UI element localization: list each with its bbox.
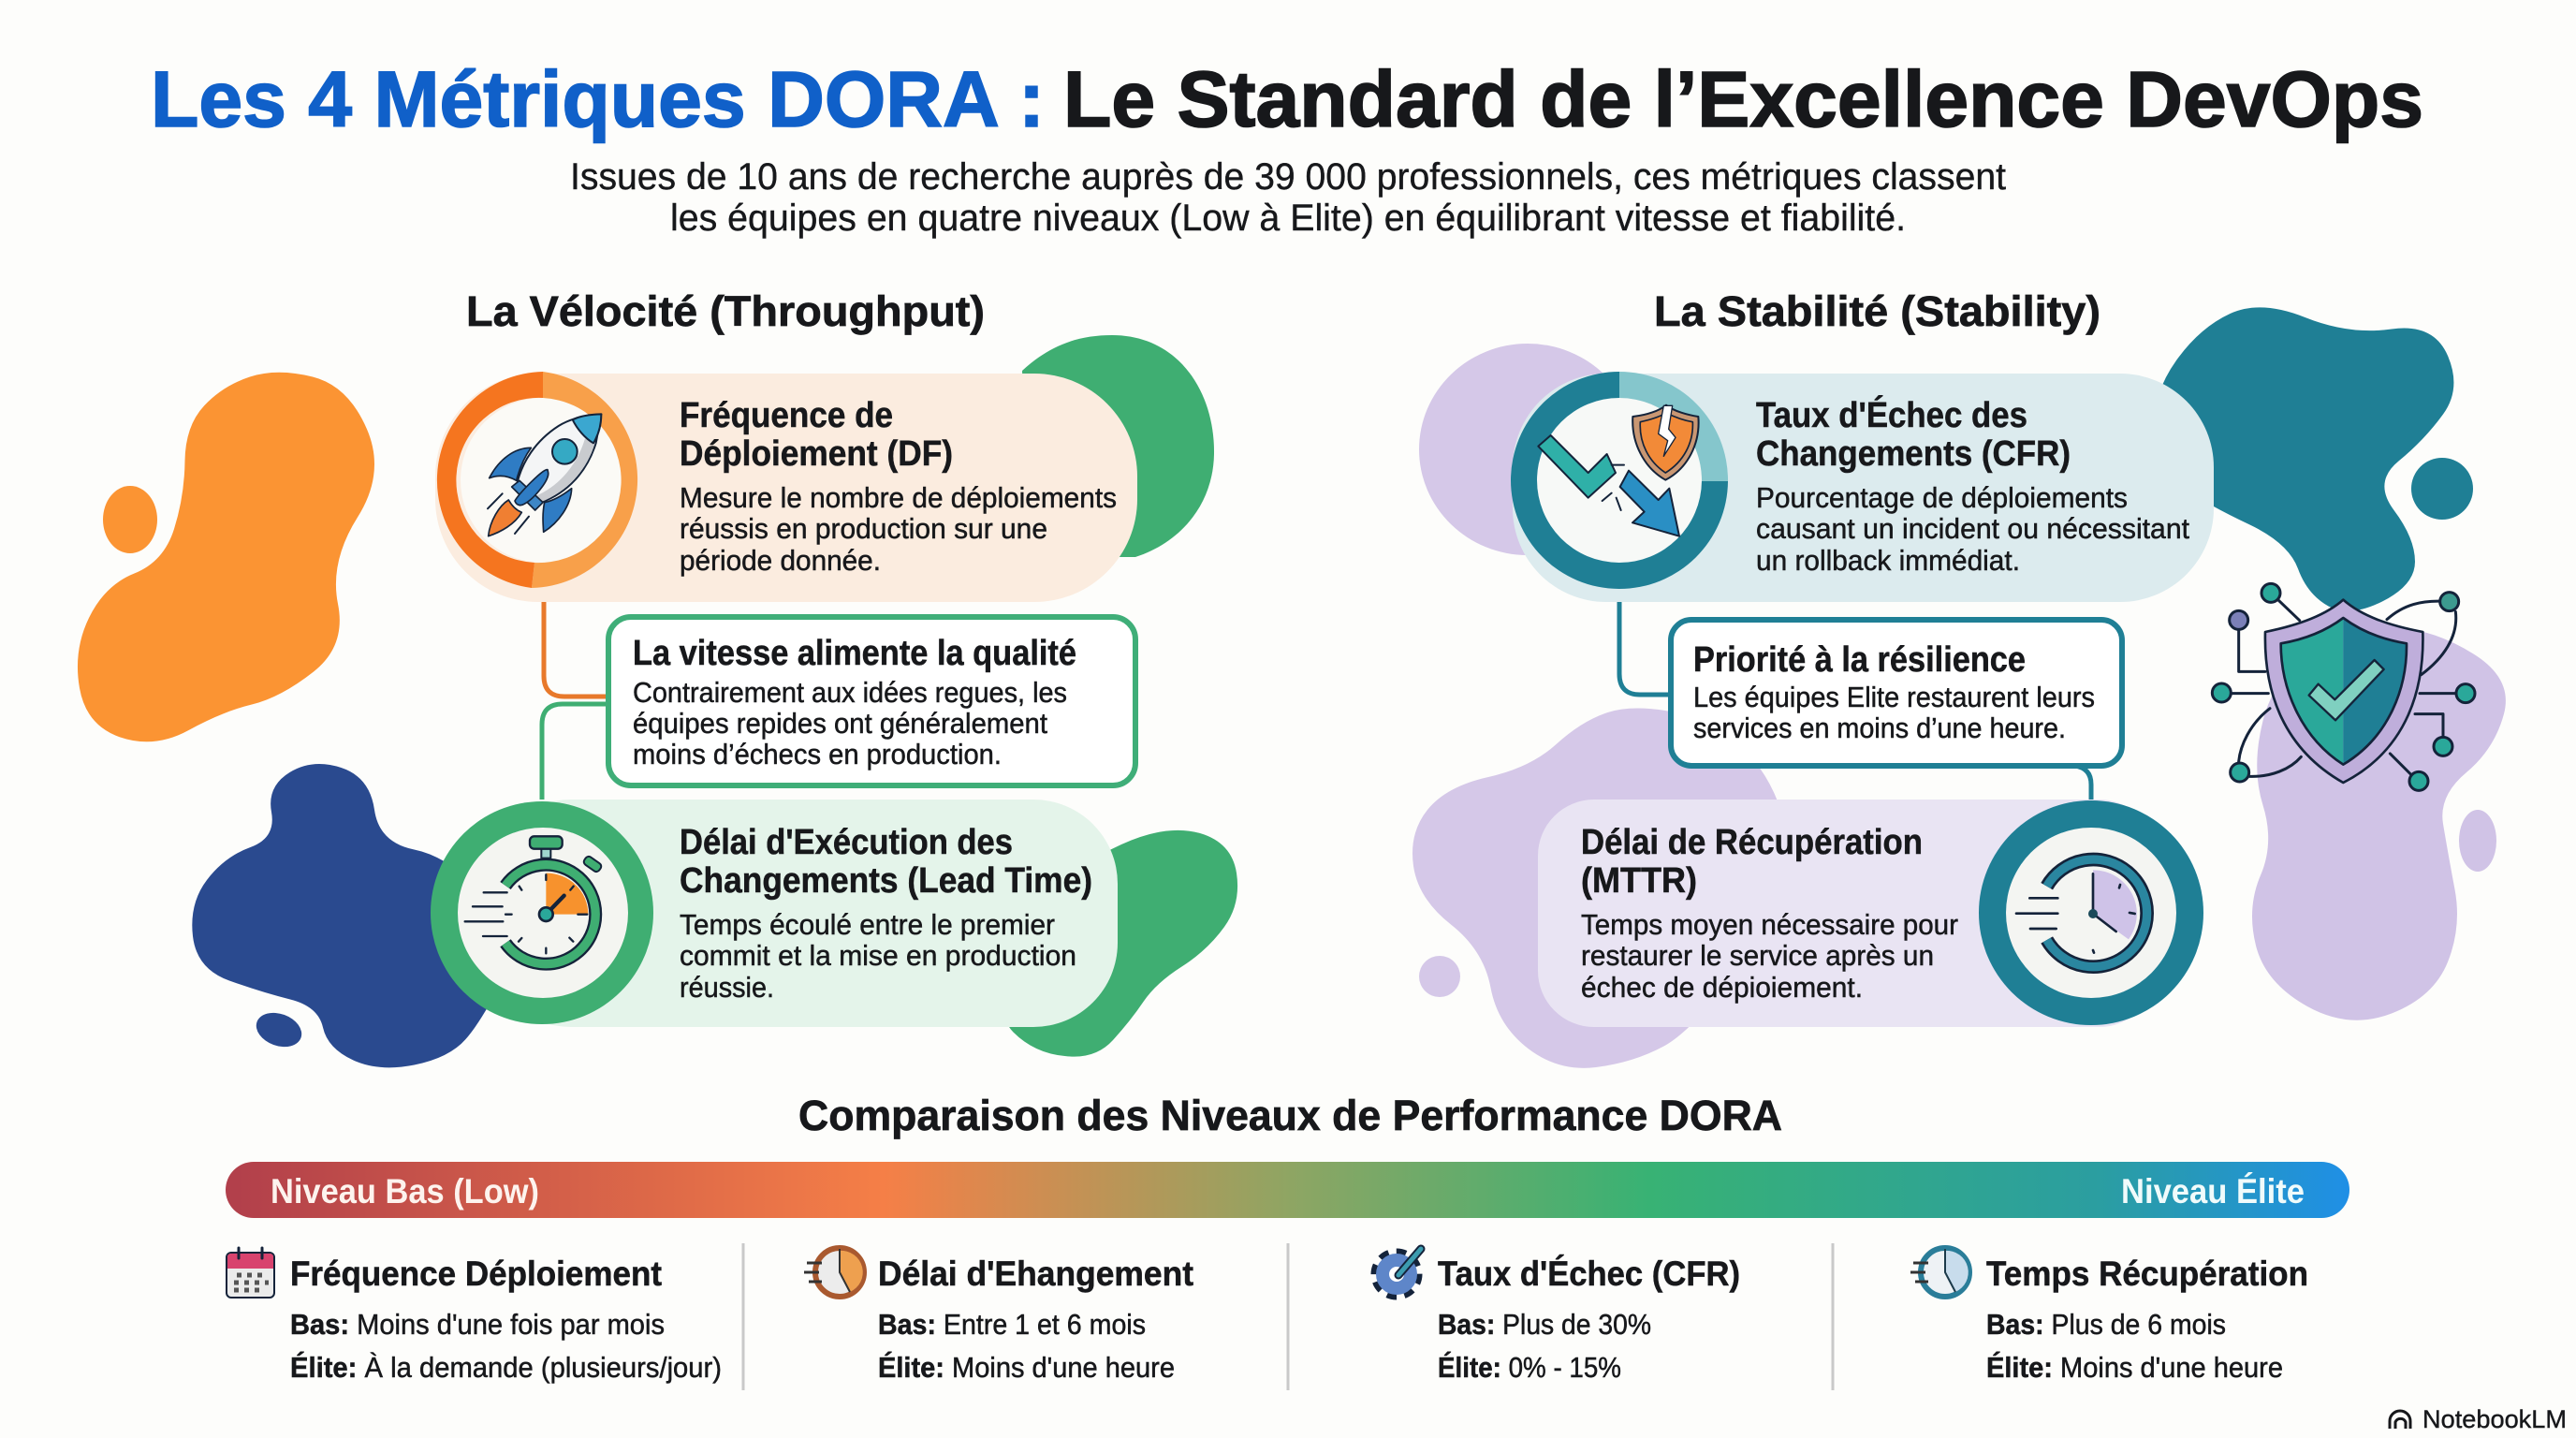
text: délai: Délai d'Exécution des: [680, 823, 1013, 862]
card: délai de récupération: [1538, 800, 2203, 1027]
text: fréquence: Mesure le nombre de déploiements: [680, 481, 1117, 514]
text: Temps Récupération: [1986, 1255, 2308, 1293]
icon: network shield: [2212, 583, 2475, 790]
decorative blob: lilac bottom: [1412, 708, 1790, 1068]
card: taux d'échec: [1511, 372, 2214, 602]
icon: calendar: [227, 1248, 274, 1298]
text: Bas: Plus de 30%: [1438, 1308, 1651, 1341]
callout: vitesse: [608, 617, 1135, 785]
connector: bottom: [2074, 766, 2091, 800]
text: délai: réussie.: [680, 971, 774, 1004]
text: délai de récupération: Délai de Récupération: [1581, 823, 1923, 862]
text: délai de récupération: restaurer le service après un: [1581, 939, 1934, 972]
callout: vitesse: moins d’échecs en production.: [633, 738, 1002, 770]
text: Élite: À la demande (plusieurs/jour): [290, 1351, 722, 1384]
text: délai de récupération: Temps moyen nécessaire pour: [1581, 908, 1958, 941]
panel: stabilité: [1412, 287, 2506, 1068]
text: fréquence: Fréquence de: [680, 396, 893, 435]
text: Fréquence Déploiement: [290, 1255, 662, 1293]
callout: résilience: Les équipes Elite restaurent leurs: [1693, 681, 2095, 713]
icon: rocket ring: [437, 372, 637, 588]
callout: résilience: Priorité à la résilience: [1693, 640, 2026, 680]
text: fréquence: [680, 396, 1117, 577]
subtitle: [570, 156, 2006, 239]
column: fréquence déploiement: [227, 1248, 722, 1384]
text: taux d'échec: Pourcentage de déploiements: [1756, 481, 2128, 514]
callout: vitesse: équipes repides ont généralement: [633, 707, 1047, 740]
text: Bas: Entre 1 et 6 mois: [878, 1308, 1146, 1341]
brand: NotebookLM: NotebookLM: [2422, 1405, 2567, 1433]
card: fréquence de déploiement: [435, 372, 1137, 602]
card: délai d'exécution: [431, 800, 1118, 1027]
title: Le Standard de l’Excellence DevOps: [1063, 55, 2423, 143]
decorative blob: teal: [2153, 307, 2473, 611]
title: Les 4 Métriques DORA :: [151, 55, 1045, 143]
gradient bar: [226, 1162, 2349, 1218]
text: [290, 1255, 722, 1384]
text: [1986, 1255, 2308, 1384]
text: [878, 1255, 1193, 1384]
text: Élite: Moins d'une heure: [878, 1351, 1175, 1384]
connector: top: [1619, 588, 1671, 695]
connector: orange: [544, 588, 608, 697]
text: délai de récupération: échec de dépioiement.: [1581, 971, 1863, 1004]
text: taux d'échec: [1756, 394, 2189, 577]
text: taux d'échec: un rollback immédiat.: [1756, 544, 2020, 577]
icon: stopwatch ring: [431, 801, 653, 1024]
icon: broken arrow ring: [1511, 372, 1728, 589]
panel: vélocité: [78, 287, 1237, 1067]
subtitle: les équipes en quatre niveaux (Low à Elite) en équilibrant vitesse et fiabilité.: [670, 198, 1906, 239]
text: Élite: Moins d'une heure: [1986, 1351, 2283, 1384]
text: taux d'échec: causant un incident ou nécessitant: [1756, 512, 2189, 545]
text: délai: Temps écoulé entre le premier: [680, 908, 1055, 941]
column: taux d'échec: [1375, 1249, 1740, 1384]
text: délai: commit et la mise en production: [680, 939, 1076, 972]
text: fréquence: réussis en production sur une: [680, 512, 1047, 545]
callout: résilience: services en moins d’une heure.: [1693, 712, 2066, 744]
text: Bas: Moins d'une fois par mois: [290, 1308, 665, 1341]
text: délai: Changements (Lead Time): [680, 861, 1092, 901]
decorative blob: green top: [1022, 335, 1214, 557]
decorative blob: lilac top: [1419, 344, 1636, 555]
text: fréquence: Déploiement (DF): [680, 434, 953, 474]
gradient bar: Niveau Bas (Low): [271, 1172, 539, 1211]
text: Bas: Plus de 6 mois: [1986, 1308, 2226, 1341]
text: fréquence: période donnée.: [680, 544, 881, 577]
icon: gear wrench: [1375, 1249, 1421, 1296]
callout: vitesse: Contrairement aux idées regues, les: [633, 676, 1067, 709]
heading: comparaison: Comparaison des Niveaux de Performance DORA: [798, 1092, 1782, 1139]
text: délai de récupération: (MTTR): [1581, 861, 1697, 901]
gradient bar: Niveau Élite: [2121, 1172, 2305, 1211]
text: Délai d'Ehangement: [878, 1255, 1193, 1293]
text: délai de récupération: [1581, 823, 1958, 1004]
heading: vélocité: La Vélocité (Throughput): [466, 287, 985, 335]
text: Élite: 0% - 15%: [1438, 1351, 1621, 1384]
subtitle: Issues de 10 ans de recherche auprès de 39 000 professionnels, ces métriques classent: [570, 156, 2006, 198]
decorative blob: navy: [192, 764, 511, 1067]
callout: vitesse: La vitesse alimente la qualité: [633, 634, 1076, 673]
column: délai changement: [804, 1248, 1193, 1384]
decorative blob: green bottom: [1003, 830, 1237, 1057]
decorative blob: lilac right: [2252, 628, 2506, 1020]
column: temps récupération: [1910, 1248, 2308, 1384]
heading: stabilité: La Stabilité (Stability): [1654, 287, 2100, 335]
text: taux d'échec: Taux d'Échec des: [1756, 394, 2027, 435]
text: Taux d'Échec (CFR): [1438, 1255, 1740, 1293]
icon: clock ring: [1979, 800, 2203, 1025]
text: [1438, 1255, 1740, 1384]
connector: green: [542, 704, 608, 800]
callout: résilience: [1671, 620, 2122, 766]
decorative blob: orange: [78, 373, 374, 741]
icon: clock blue: [1910, 1248, 1969, 1297]
text: taux d'échec: Changements (CFR): [1756, 434, 2071, 474]
icon: clock copper: [804, 1248, 864, 1297]
text: délai: [680, 823, 1092, 1004]
